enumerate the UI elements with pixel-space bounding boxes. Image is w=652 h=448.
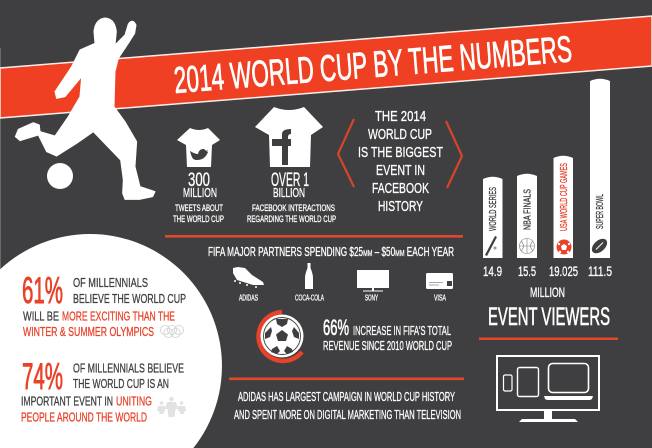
stat: 61 percent [22,270,186,339]
icon: twitter t-shirt [177,128,220,167]
twitter stat: TWEETS ABOUT [175,203,223,213]
icon: people [157,397,186,417]
bar: super bowl [588,79,612,279]
stat: 74 percent: UNITING [116,394,152,408]
icon: adidas boot: ADIDAS [239,294,258,302]
stat: 74 percent [21,356,184,424]
bar chart: event viewers [483,79,612,300]
facebook stat: FACEBOOK INTERACTIONS [252,203,335,213]
revenue stat [323,315,452,353]
biggest event callout: IS THE BIGGEST [358,144,443,161]
stat: 61 percent: MORE EXCITING THAN THE [62,308,175,324]
biggest event callout: HISTORY [378,198,423,215]
biggest event callout: FACEBOOK [372,180,429,197]
stat: 61 percent: OF MILLENNIALS [73,275,148,290]
icon: sony tv [357,270,389,302]
bar: nba finals: NBA FINALS [522,189,534,230]
icon: coca-cola bottle: COCA-COLA [295,294,324,302]
stat: 74 percent: 74% [22,356,63,397]
bar: world series [483,177,502,279]
ball [47,163,73,189]
bar: nba finals: 15.5 [518,263,536,279]
stat: 61 percent: 61% [22,270,63,311]
bar: usa world cup games: 19.025 [549,263,578,279]
bar: usa world cup games [549,156,578,279]
biggest event callout: THE 2014 [375,108,426,125]
banner [0,16,652,118]
stat: 61 percent: BELIEVE THE WORLD CUP [73,291,186,306]
twitter stat [173,128,224,224]
revenue stat: 66% [323,315,349,340]
adidas campaign text: ADIDAS HAS LARGEST CAMPAIGN IN WORLD CUP HISTORY [238,389,455,404]
icon: adidas boot [233,267,264,302]
bar: super bowl: 111.5 [588,263,612,279]
stat: 74 percent: THE WORLD CUP IS AN [73,376,169,391]
stat: 61 percent: WILL BE [23,308,59,324]
twitter stat: THE WORLD CUP [173,214,224,224]
icon: soccer ball with progress ring [259,312,304,361]
bar: nba finals [517,174,537,279]
twitter stat: MILLION [183,186,217,200]
icon: coca-cola bottle [295,263,324,302]
facebook stat: OVER 1 [271,170,309,191]
facebook stat: REGARDING THE WORLD CUP [247,214,336,224]
stat: 74 percent: OF MILLENNIALS BELIEVE [73,360,184,376]
stat: 61 percent: WINTER & SUMMER OLYMPICS [23,324,154,339]
bar: usa world cup games: USA WORLD CUP GAMES [559,163,570,231]
panel: millennials circle [0,234,222,448]
facebook stat: BILLION [273,186,305,200]
bar: world series: WORLD SERIES [488,187,499,231]
facebook stat [247,107,336,224]
biggest event callout [338,108,462,215]
revenue stat: REVENUE SINCE 2010 WORLD CUP [323,338,452,353]
heading: partners spending: FIFA MAJOR PARTNERS SPENDING $25MM – $50MM EACH YEAR [208,245,454,259]
stat: 74 percent: IMPORTANT EVENT IN [21,394,113,408]
player silhouette [15,18,155,199]
icon: devices in monitor [497,356,599,422]
stat: 74 percent: PEOPLE AROUND THE WORLD [21,410,147,424]
icon: facebook t-shirt [255,107,323,167]
twitter stat: 300 [188,170,210,191]
icon: sony tv: SONY [365,294,378,302]
biggest event callout: EVENT IN [376,162,425,179]
revenue stat: INCREASE IN FIFA'S TOTAL [353,323,451,338]
icon: visa card [426,273,453,302]
biggest event callout: WORLD CUP [368,126,432,143]
bar chart: event viewers: MILLION [530,284,565,300]
fifa partners section [165,235,463,302]
icon: visa card: VISA [434,294,446,302]
adidas campaign text [234,389,461,422]
adidas campaign text: AND SPENT MORE ON DIGITAL MARKETING THAN TELEVISION [234,407,461,422]
bar: world series: 14.9 [483,263,502,279]
icon: olympic rings [160,325,184,338]
bar: super bowl: SUPER BOWL [595,194,606,229]
